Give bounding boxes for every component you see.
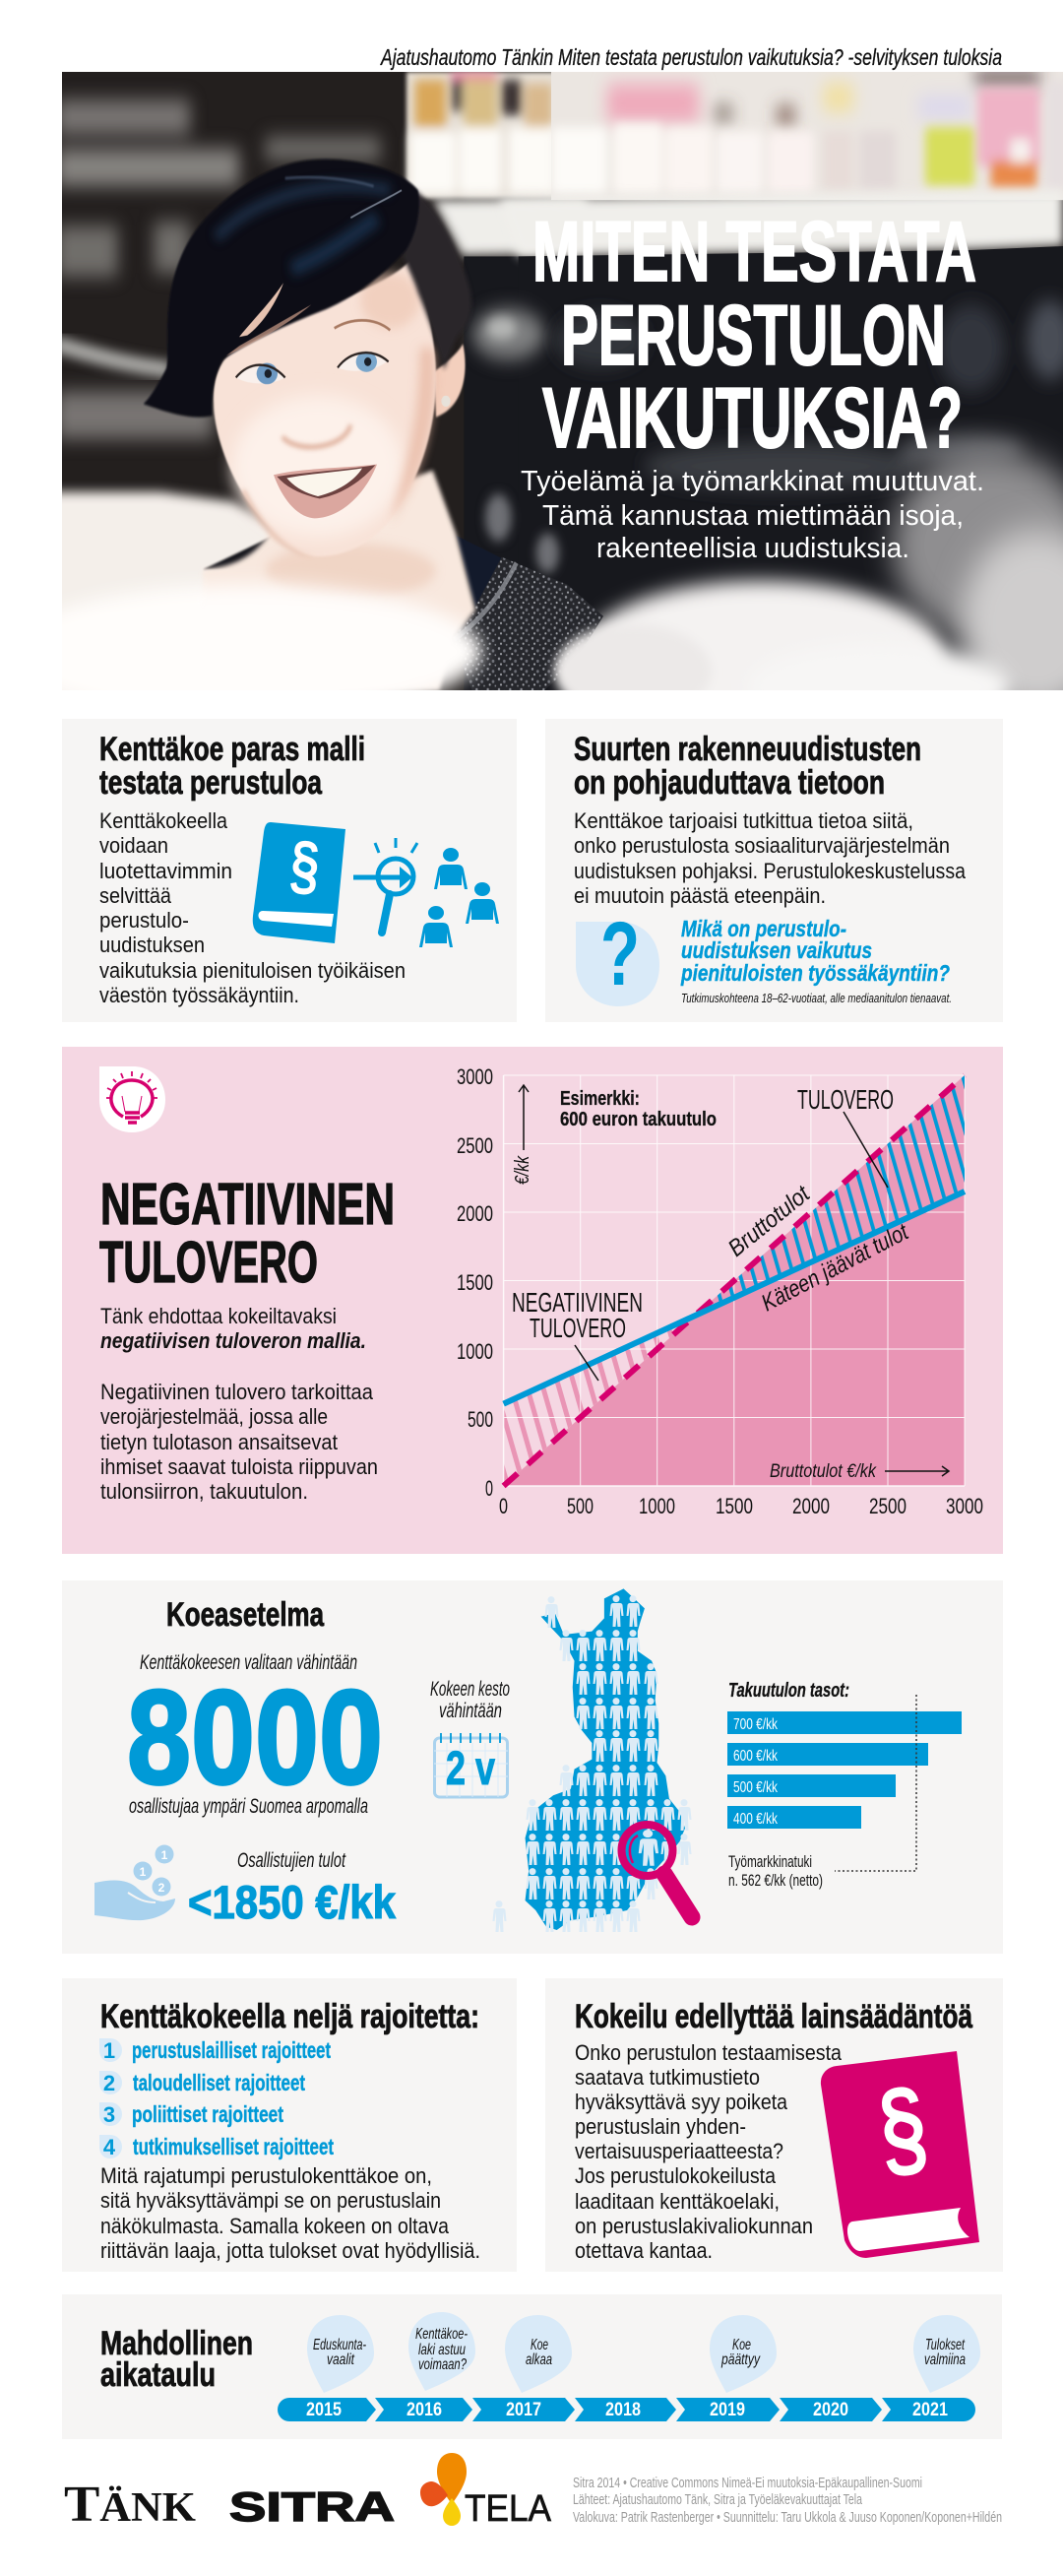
credits: Sitra 2014 • Creative Commons Nimeä-Ei muutoksia-Epäkaupallinen-Suomi (573, 2476, 922, 2491)
body text: voidaan (99, 833, 168, 858)
milestone: 2019 koe päättyy (710, 2315, 777, 2393)
milestone: 2016 kenttäkoelaki: laki astuu (418, 2342, 466, 2358)
y axis labels: 500 (468, 1407, 493, 1432)
list of limits: poliittiset rajoitteet (132, 2101, 283, 2127)
duration label (430, 1678, 510, 1722)
y axis labels: 2500 (457, 1133, 493, 1158)
y axis labels: 0 (485, 1476, 493, 1501)
hero intro text: rakenteellisia uudistuksia. (596, 533, 909, 564)
big number: 8000 (127, 1662, 383, 1812)
timeline arrows: 2018 (605, 2400, 641, 2420)
bar chart: guarantee income levels: Takuutulon tasot: (728, 1680, 849, 1702)
timeline arrows: 2017 (506, 2400, 541, 2420)
hero intro text: Työelämä ja työmarkkinat muuttuvat. (521, 466, 984, 497)
panel: kokeilu edellyttää lainsäädäntöä (545, 1978, 1003, 2272)
list of limits: 2 (103, 2071, 115, 2095)
body text: on perustuslakivaliokunnan (575, 2214, 813, 2238)
income limit (188, 1849, 397, 1928)
proposal text (100, 1304, 366, 1353)
body text: luotettavimmin (99, 859, 232, 883)
icon: magenta magnifier (622, 1825, 692, 1917)
explanation text: tulonsiirron, takuutulon. (100, 1479, 308, 1504)
y axis arrow and unit (512, 1085, 533, 1185)
timeline arrows (278, 2398, 975, 2421)
heading: TULOVERO (99, 1230, 318, 1295)
neck and chest (200, 471, 475, 690)
body text: uudistuksen (99, 933, 205, 957)
labour market support note: n. 562 €/kk (netto) (728, 1871, 823, 1890)
body text: Onko perustulon testaamisesta (575, 2040, 843, 2065)
collar and top (203, 537, 272, 569)
proposal text: Tänk ehdottaa kokeiltavaksi (100, 1304, 337, 1328)
x axis labels: 2000 (792, 1494, 830, 1518)
x axis labels: 3000 (946, 1494, 983, 1518)
heading (99, 731, 365, 802)
icon: blue law book (253, 822, 345, 943)
y axis arrow and unit: €/kk (512, 1155, 533, 1185)
x axis labels: 1000 (639, 1494, 675, 1518)
heading: NEGATIIVINEN (100, 1172, 395, 1237)
milestone: 2016 kenttäkoelaki: Kenttäkoe- (415, 2326, 468, 2343)
list of limits: 4 (103, 2135, 116, 2159)
logo: Tänk: TÄNK (64, 2477, 196, 2533)
icon: calendar 2 years (434, 1733, 508, 1797)
label: negatiivinen tulovero: TULOVERO (530, 1313, 626, 1343)
fringe hair (144, 160, 419, 418)
timeline arrows: 2015 (306, 2400, 342, 2420)
milestone: 2019 koe päättyy: päättyy (720, 2351, 761, 2368)
bar chart: guarantee income levels (727, 1680, 962, 1871)
body text: uudistuksen pohjaksi. Perustulokeskustelussa (574, 859, 967, 883)
label: tulovero: TULOVERO (797, 1084, 894, 1115)
heading: on pohjauduttava tietoon (574, 764, 885, 802)
logo: Sitra: SITRA (229, 2483, 395, 2530)
background blurs beside the ear (472, 308, 544, 359)
list of limits: 1 (103, 2038, 115, 2063)
body text: saatava tutkimustieto (575, 2065, 760, 2090)
shaved side hair (404, 188, 471, 369)
body text: onko perustulosta sosiaaliturvajärjestelmän (574, 833, 950, 858)
heading: Kenttäkokeella neljä rajoitetta: (100, 1998, 479, 2035)
heading: Kenttäkoe paras malli (99, 731, 365, 768)
heading: testata perustuloa (99, 764, 323, 802)
body text: selvittää (99, 883, 172, 908)
milestone: 2017 koe alkaa: alkaa (526, 2351, 552, 2368)
eyes (236, 366, 285, 383)
timeline arrows: 2019 (710, 2400, 745, 2420)
label: tulovero (797, 1084, 894, 1188)
research question: Mikä on perustulo- (681, 916, 846, 941)
icon: people (419, 848, 499, 947)
body text: vertaisuusperiaatteesta? (575, 2139, 783, 2163)
bar chart: guarantee income levels: 400 €/kk (733, 1811, 779, 1828)
y axis labels: 1000 (457, 1339, 493, 1364)
participants caption: osallistujaa ympäri Suomea arpomalla (129, 1795, 368, 1818)
body text: väestön työssäkäyntiin. (99, 983, 299, 1007)
income limit: <1850 €/kk (188, 1876, 397, 1928)
label: bruttotulot line: Bruttotulot (723, 1180, 816, 1262)
milestone: 2016 kenttäkoelaki: voimaan? (418, 2356, 467, 2373)
panel: koeasetelma (62, 1580, 1003, 1954)
icon: magenta law book (821, 2051, 979, 2258)
body text: otettava kantaa. (575, 2238, 713, 2263)
body text (575, 2040, 843, 2263)
milestone: 2019 koe päättyy: Koe (732, 2337, 751, 2353)
bar chart: guarantee income levels: 700 €/kk (733, 1716, 779, 1733)
logo: Tela (420, 2453, 552, 2530)
heading: aikataulu (100, 2356, 216, 2394)
example label (560, 1088, 717, 1130)
y axis labels: 1500 (457, 1270, 493, 1295)
credits: Lähteet: Ajatushautomo Tänk, Sitra ja Työeläkevakuuttajat Tela (573, 2492, 863, 2508)
x axis labels (499, 1494, 983, 1518)
label: negatiivinen tulovero: NEGATIIVINEN (512, 1287, 643, 1318)
credits (573, 2476, 1002, 2526)
icon: magnifier with arrow (353, 838, 417, 933)
panel: negatiivinen tulovero (62, 1047, 1003, 1554)
bar chart: guarantee income levels: 600 €/kk (733, 1748, 779, 1765)
body text (99, 808, 406, 1007)
x axis labels: 1500 (716, 1494, 753, 1518)
milestone: 2015 eduskuntavaalit (307, 2315, 374, 2393)
icon: hand with coins: 1 (161, 1848, 168, 1862)
mouth (274, 464, 377, 518)
explanation text: verojärjestelmää, jossa alle (100, 1404, 328, 1429)
milestone: 2016 kenttäkoelaki (408, 2312, 475, 2391)
body text: ei muutoin päästä eteenpäin. (574, 883, 826, 908)
labour market support note (728, 1852, 823, 1890)
logo: Tela: TELA (465, 2488, 552, 2530)
hero title (532, 205, 976, 466)
participants intro: Kenttäkokeesen valitaan vähintään (140, 1651, 357, 1674)
y axis labels: 2000 (457, 1201, 493, 1226)
body text: vaikutuksia pienituloisen työikäisen (99, 958, 406, 983)
panel: suurten rakenneuudistusten (545, 719, 1003, 1022)
panel: kenttäkoe paras malli (62, 719, 517, 1022)
line chart (457, 1064, 983, 1518)
body text: perustulo- (99, 908, 189, 933)
face (214, 261, 436, 556)
milestone: 2021 tulokset valmiina: Tulokset (925, 2337, 965, 2353)
hero intro text (521, 466, 984, 564)
research question: uudistuksen vaikutus (681, 937, 872, 963)
milestone: 2017 koe alkaa: Koe (531, 2337, 548, 2353)
panel: mahdollinen aikataulu (62, 2294, 1002, 2439)
icon: calendar 2 years: 2 v (446, 1743, 495, 1795)
label: net income line: Käteen jäävät tulot (757, 1218, 913, 1317)
body text: näkökulmasta. Samalla kokeen on oltava (100, 2214, 450, 2238)
example label: 600 euron takuutulo (560, 1109, 717, 1130)
body text: Mitä rajatumpi perustulokenttäkoe on, (100, 2163, 432, 2188)
icon: hand with coins (94, 1845, 175, 1920)
icon: hand with coins: 2 (158, 1881, 165, 1895)
milestone: 2017 koe alkaa (505, 2315, 572, 2393)
list of limits: taloudelliset rajoitteet (133, 2070, 305, 2095)
body text: laaditaan kenttäkoelaki, (575, 2189, 780, 2214)
hero photo (62, 72, 1063, 690)
icon: magenta law book: § (872, 2067, 933, 2191)
body text: Kenttäkokeella (99, 808, 228, 833)
milestone: 2015 eduskuntavaalit: Eduskunta- (313, 2337, 366, 2353)
icon: light bulb (99, 1066, 165, 1132)
timeline arrows: 2016 (406, 2400, 442, 2420)
body text: riittävän laaja, jotta tulokset ovat hyödyllisiä. (100, 2238, 480, 2263)
milestone: 2021 tulokset valmiina (913, 2315, 980, 2393)
example label: Esimerkki: (560, 1088, 640, 1110)
panel: neljä rajoitetta (62, 1978, 517, 2272)
brow (335, 320, 390, 330)
heading: Mahdollinen (100, 2325, 253, 2362)
explanation text: tietyn tulotason ansaitsevat (100, 1430, 338, 1454)
body text: perustuslain yhden- (575, 2114, 746, 2139)
list of limits: perustuslailliset rajoitteet (132, 2037, 331, 2063)
list of limits (99, 2037, 334, 2159)
bar chart: guarantee income levels: 500 €/kk (733, 1779, 779, 1796)
milestone: 2021 tulokset valmiina: valmiina (924, 2351, 966, 2368)
ear (434, 344, 466, 417)
body text: sitä hyväksyttävämpi se on perustuslain (100, 2188, 441, 2213)
heading: Suurten rakenneuudistusten (574, 731, 921, 768)
body text (574, 808, 967, 908)
list of limits: tutkimukselliset rajoitteet (133, 2134, 334, 2159)
icon: question mark drop: ? (600, 904, 640, 1004)
map of Finland with people (492, 1588, 692, 1932)
heading (574, 731, 921, 802)
x axis labels: 0 (499, 1494, 508, 1518)
duration label: vähintään (439, 1700, 502, 1722)
timeline arrows: 2020 (813, 2400, 848, 2420)
explanation text: Negatiivinen tulovero tarkoittaa (100, 1380, 374, 1404)
y axis labels (457, 1064, 493, 1501)
body text (100, 2163, 480, 2263)
hero intro text: Tämä kannustaa miettimään isoja, (542, 500, 964, 532)
label: negatiivinen tulovero (512, 1287, 643, 1381)
body text: Kenttäkoe tarjoaisi tutkittua tietoa siitä, (574, 808, 913, 833)
x axis labels: 500 (567, 1494, 594, 1518)
nose (282, 424, 350, 447)
icon: blue law book: § (287, 829, 322, 903)
y axis labels: 3000 (457, 1064, 493, 1089)
research question: pienituloisten työssäkäyntiin? (680, 960, 950, 986)
x axis arrow and unit (770, 1461, 949, 1482)
labour market support note: Työmarkkinatuki (728, 1852, 812, 1871)
duration label: Kokeen kesto (430, 1678, 510, 1701)
x axis arrow and unit: Bruttotulot €/kk (770, 1461, 877, 1482)
icon: question mark drop (576, 904, 659, 1006)
x axis labels: 2500 (869, 1494, 907, 1518)
icon: hand with coins: 1 (140, 1865, 147, 1879)
timeline arrows: 2021 (912, 2400, 948, 2420)
explanation text (100, 1380, 378, 1504)
body text: Jos perustulokokeilusta (575, 2163, 777, 2188)
heading: Koeasetelma (166, 1596, 325, 1634)
explanation text: ihmiset saavat tuloista riippuvan (100, 1454, 378, 1479)
list of limits: 3 (103, 2102, 115, 2127)
heading (100, 2325, 253, 2394)
footnote: Tutkimuskohteena 18–62-vuotiaat, alle mediaanitulon tienaavat. (681, 991, 952, 1005)
proposal text: negatiivisen tuloveron mallia. (100, 1328, 366, 1353)
research question (680, 916, 950, 986)
body text: hyväksyttävä syy poiketa (575, 2090, 788, 2114)
foreground blur left (62, 483, 273, 690)
income limit: Osallistujien tulot (237, 1849, 346, 1872)
milestone: 2015 eduskuntavaalit: vaalit (327, 2351, 354, 2368)
heading (99, 1172, 395, 1295)
